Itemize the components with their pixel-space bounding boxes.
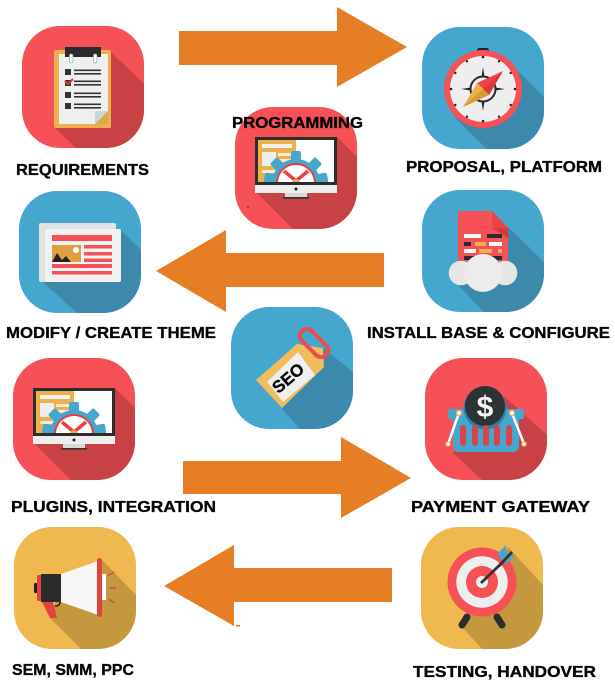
label: modify / create theme: MODIFY / CREATE THEME [6, 325, 216, 342]
icon: modify theme newspaper [19, 191, 141, 313]
icon: SEO tag: SEO [269, 359, 308, 397]
label: programming: PROGRAMMING [232, 115, 363, 132]
label: install base & configure: INSTALL BASE & CONFIGURE [367, 325, 610, 342]
icon: payment basket [425, 358, 547, 480]
label: testing, handover: TESTING, HANDOVER [413, 664, 596, 681]
icon: SEM megaphone [14, 527, 136, 649]
icon: testing target [421, 527, 543, 649]
icon: install base document and cloud [422, 190, 544, 312]
icon: plugins monitor [13, 358, 135, 480]
label: proposal, platform: PROPOSAL, PLATFORM [406, 159, 602, 176]
arrow: testing to SEM [164, 545, 392, 626]
label: requirements: REQUIREMENTS [16, 162, 149, 179]
icon: requirements clipboard [22, 26, 144, 148]
label: payment gateway: PAYMENT GATEWAY [411, 499, 590, 516]
icon: payment basket: $ [477, 391, 494, 424]
icon: SEO tag [231, 307, 353, 429]
label: sem, smm, ppc: SEM, SMM, PPC [12, 662, 134, 679]
icon: proposal compass [422, 27, 544, 149]
icon: programming monitor [235, 107, 357, 229]
arrow: requirements to proposal [179, 7, 407, 87]
arrow: install base to modify theme [156, 230, 384, 312]
arrow: plugins to payment gateway [183, 437, 411, 518]
label: plugins, integration: PLUGINS, INTEGRATION [11, 499, 216, 516]
